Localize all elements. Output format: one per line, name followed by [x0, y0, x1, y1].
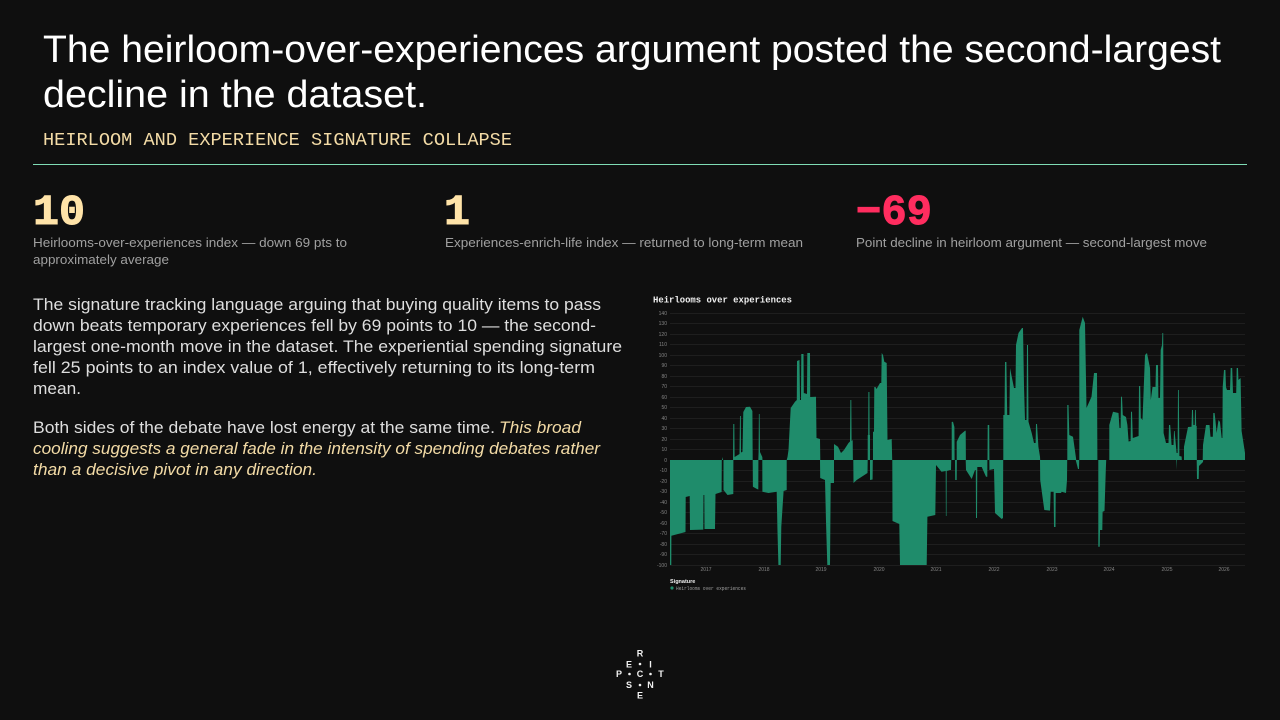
stat: experiences index 1: Experiences-enrich-life index — returned to long-term mean: [445, 236, 803, 250]
y axis labels: 130: [659, 321, 667, 327]
logo: Persistence cross: C: [637, 669, 644, 679]
y axis labels: 50: [661, 405, 667, 411]
body paragraph 1: down beats temporary experiences fell by 69 points to 10 — the second-: [33, 317, 596, 335]
stat: experiences index 1: 1: [444, 188, 470, 237]
y axis labels: 40: [661, 416, 667, 422]
x axis labels: [700, 567, 1230, 573]
x axis labels: 2024: [1103, 567, 1115, 573]
logo: Persistence cross: R: [637, 648, 644, 658]
y axis labels: 60: [661, 395, 667, 401]
y axis labels: [657, 311, 667, 569]
body paragraph 1: [33, 296, 622, 398]
y axis labels: -30: [660, 489, 667, 495]
y axis labels: -50: [660, 510, 667, 516]
area series: negative values: [670, 460, 1203, 565]
y axis labels: -90: [660, 552, 667, 558]
y axis labels: 10: [661, 447, 667, 453]
y axis labels: 70: [661, 384, 667, 390]
y axis labels: -70: [660, 531, 667, 537]
y axis labels: 140: [659, 311, 667, 317]
x axis labels: 2018: [758, 567, 770, 573]
y axis labels: -100: [657, 563, 667, 569]
stat: heirlooms index 10: [33, 188, 347, 267]
title: [43, 29, 1221, 116]
y axis labels: -20: [660, 479, 667, 485]
body paragraph 2: [33, 419, 602, 479]
x axis labels: 2026: [1218, 567, 1230, 573]
stat: point decline -69: [856, 188, 1207, 250]
subtitle: HEIRLOOM AND EXPERIENCE SIGNATURE COLLAPSE: [43, 130, 512, 151]
logo: Persistence cross: N: [647, 680, 654, 690]
y axis labels: 120: [659, 332, 667, 338]
y axis labels: 100: [659, 353, 667, 359]
y axis labels: 20: [661, 437, 667, 443]
y axis labels: -10: [660, 468, 667, 474]
y axis labels: 30: [661, 426, 667, 432]
x axis labels: 2021: [930, 567, 942, 573]
title: decline in the dataset.: [43, 74, 427, 116]
legend: [670, 579, 746, 592]
x axis labels: 2022: [988, 567, 1000, 573]
stat: point decline -69: Point decline in heirloom argument — second-largest move: [856, 236, 1207, 250]
stat: heirlooms index 10: 10: [33, 188, 85, 237]
body paragraph 1: fell 25 points to an index value of 1, effectively returning to its long-term: [33, 359, 595, 377]
body paragraph 2: cooling suggests a general fade in the intensity of spending debates rather: [33, 440, 602, 458]
stat: heirlooms index 10: Heirlooms-over-experiences index — down 69 pts to: [33, 236, 347, 250]
body paragraph 2: than a decisive pivot in any direction.: [33, 461, 317, 479]
chart title: Heirlooms over experiences: [653, 296, 792, 306]
legend: Heirlooms over experiences: [676, 586, 746, 592]
chart: heirlooms over experiences: [653, 296, 1245, 592]
body paragraph 2: Both sides of the debate have lost energy at the same time.: [33, 419, 495, 437]
logo: Persistence cross: P: [616, 669, 622, 679]
body paragraph 1: largest one-month move in the dataset. The experiential spending signature: [33, 338, 622, 356]
y axis labels: -40: [660, 500, 667, 506]
y axis labels: 110: [659, 342, 667, 348]
logo: Persistence cross: I: [649, 660, 652, 670]
body paragraph 2: This broad: [499, 419, 582, 437]
logo: Persistence cross: S: [626, 680, 632, 690]
x axis labels: 2025: [1161, 567, 1173, 573]
stat: point decline -69: −69: [856, 188, 932, 237]
y axis labels: 80: [661, 374, 667, 380]
logo: Persistence cross: E: [637, 690, 643, 700]
y axis labels: -80: [660, 542, 667, 548]
x axis labels: 2017: [700, 567, 712, 573]
legend: Signature: [670, 579, 695, 585]
stat: heirlooms index 10: approximately average: [33, 253, 169, 267]
x axis labels: 2023: [1046, 567, 1058, 573]
x axis labels: 2020: [873, 567, 885, 573]
body paragraph 1: The signature tracking language arguing that buying quality items to pass: [33, 296, 601, 314]
logo: Persistence cross: E: [626, 660, 632, 670]
y axis labels: 0: [664, 458, 667, 464]
body paragraph 1: mean.: [33, 380, 81, 398]
y axis labels: 90: [661, 363, 667, 369]
logo: Persistence cross: [616, 648, 664, 700]
x axis labels: 2019: [815, 567, 827, 573]
title: The heirloom-over-experiences argument posted the second-largest: [43, 29, 1221, 71]
area series: positive values: [722, 317, 1245, 460]
stat: experiences index 1: [444, 188, 803, 250]
y axis labels: -60: [660, 521, 667, 527]
logo: Persistence cross: T: [658, 669, 664, 679]
